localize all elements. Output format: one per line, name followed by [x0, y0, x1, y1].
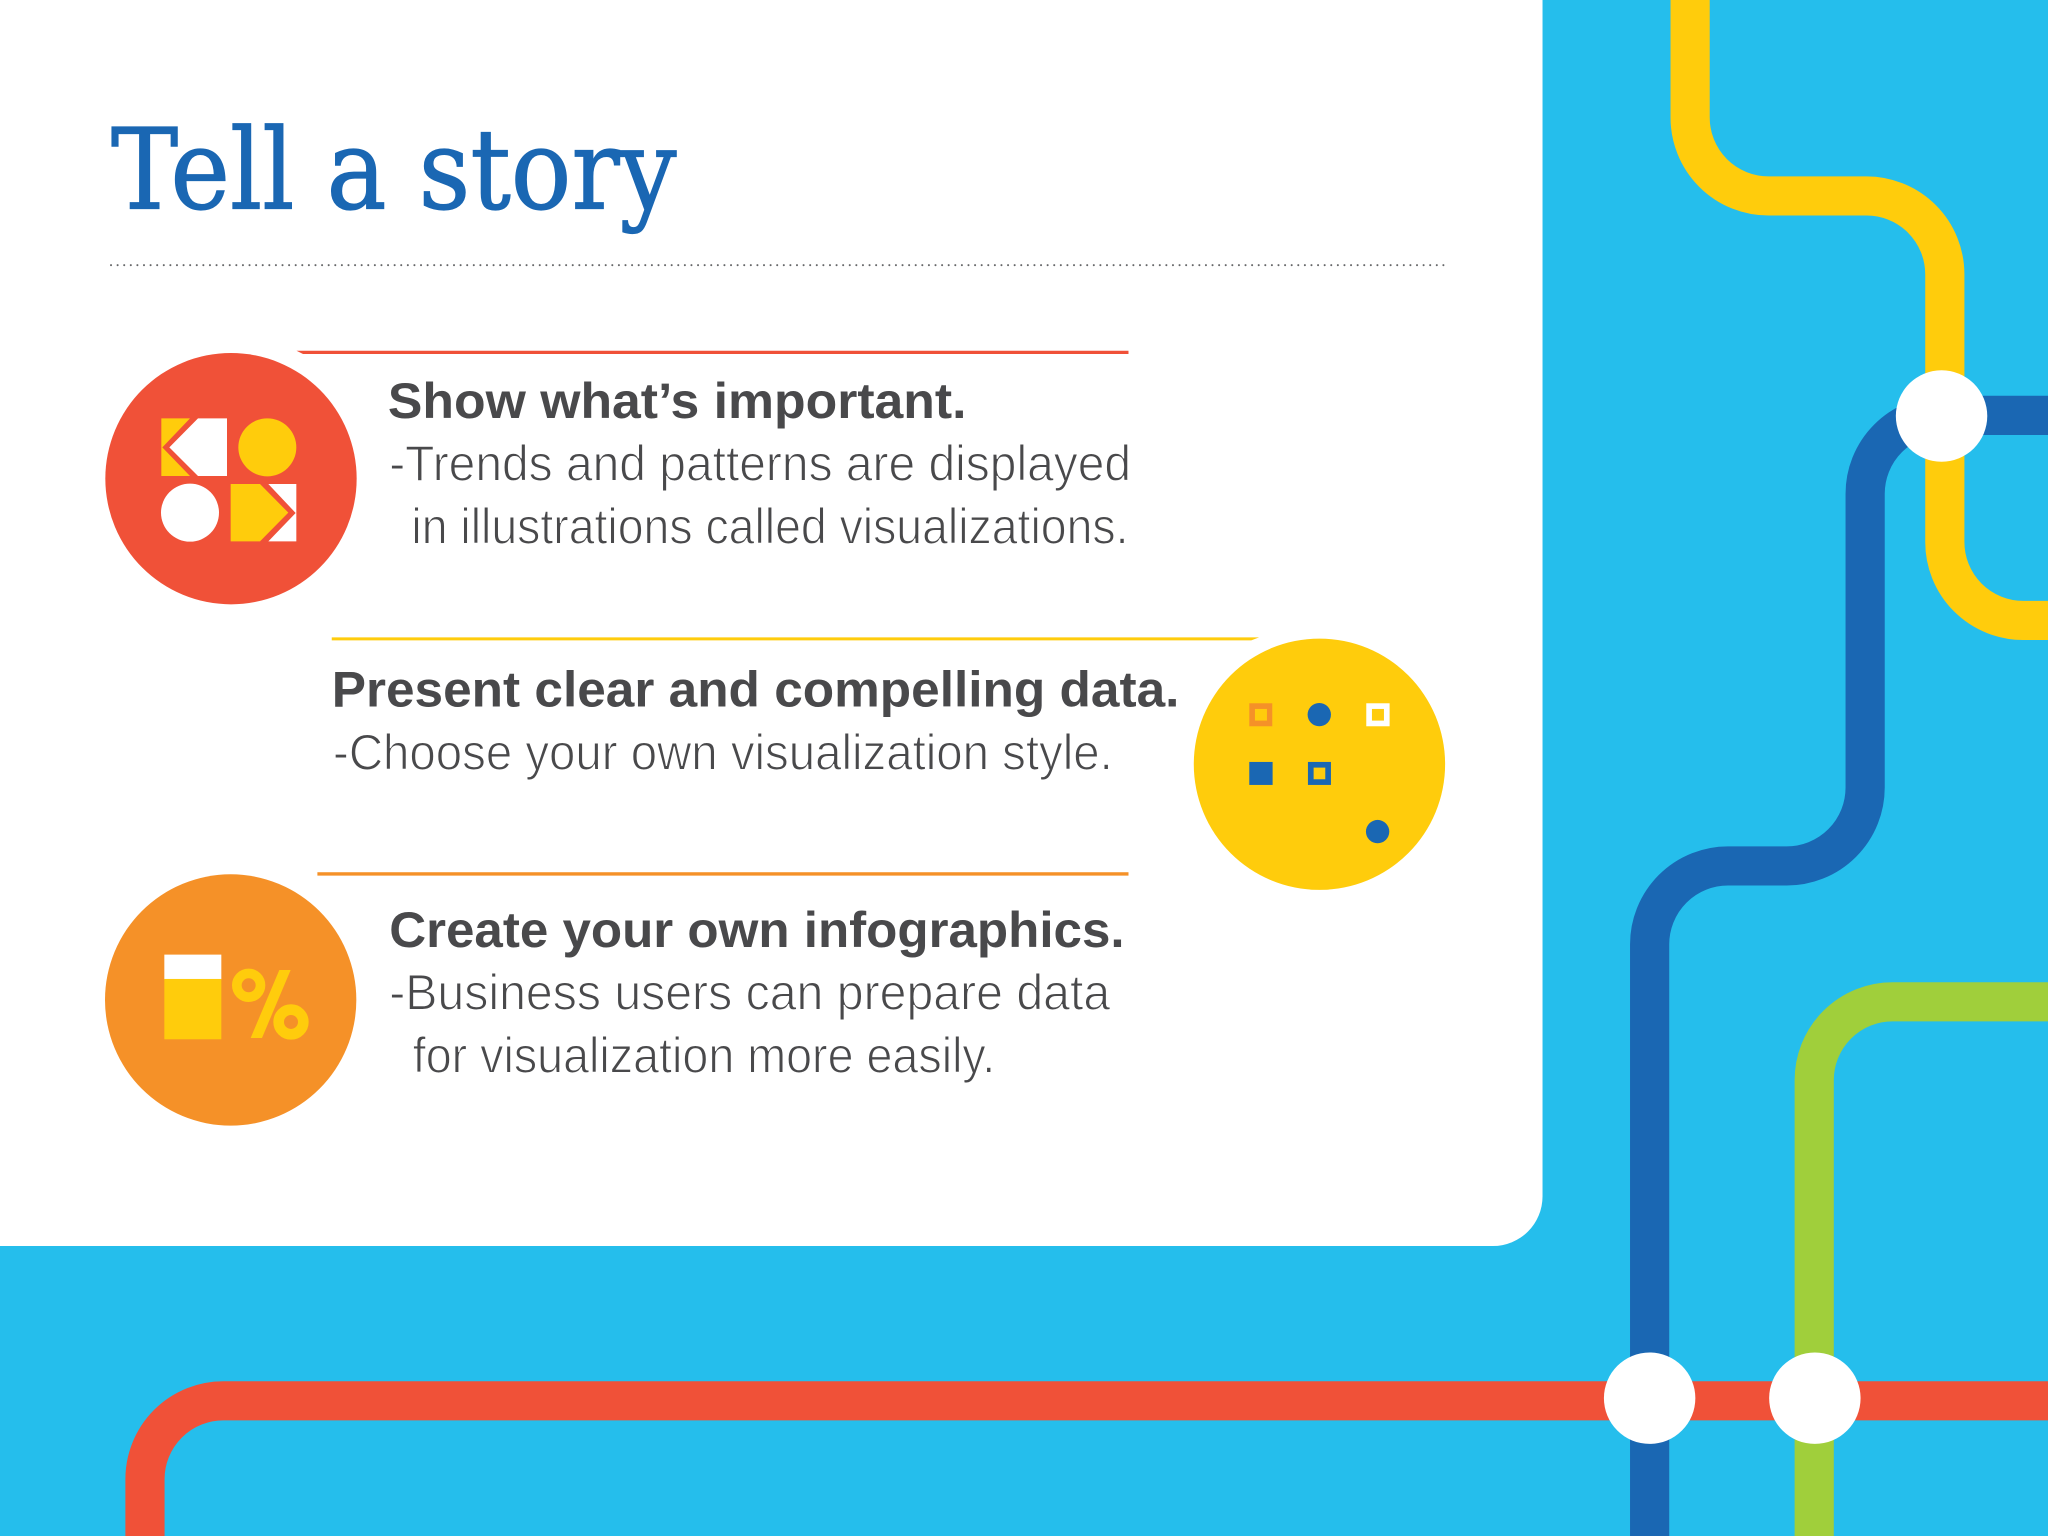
accent rule: orange: [317, 872, 1128, 876]
body text: trends and patterns: in illustrations called visualizations.: [411, 498, 1128, 554]
metro station: upper right: [1896, 370, 1987, 462]
metro line: green: [1814, 1002, 2048, 1536]
body text: choose your style: -Choose your own visualization style.: [333, 724, 1113, 780]
body text: trends and patterns: -Trends and patterns are displayed: [389, 436, 1131, 492]
icon: percent bar on orange circle: [105, 874, 356, 1126]
icon: dots and squares on yellow circle: [1194, 639, 1445, 890]
title: Tell a story: [111, 106, 677, 235]
metro line: red: [145, 1401, 2048, 1536]
item 3: create your own infographics: [105, 872, 1128, 1126]
body text: business users: for visualization more easily.: [413, 1027, 995, 1083]
accent rule: red: [296, 351, 1128, 354]
heading: present clear and compelling data: Present clear and compelling data.: [332, 662, 1179, 718]
item 2: present clear and compelling data: [332, 637, 1445, 890]
dotted divider: [111, 264, 1446, 266]
body text: trends and patterns: [389, 436, 1131, 554]
icon: shapes on red circle: [105, 353, 357, 604]
metro station: lower left: [1604, 1352, 1695, 1444]
body text: business users: [389, 965, 1111, 1083]
white content panel: [0, 0, 1543, 1246]
item 1: show what's important: [105, 351, 1131, 604]
body text: business users: -Business users can prepare data: [389, 965, 1111, 1021]
heading: create your own infographics: Create your own infographics.: [389, 902, 1125, 958]
accent rule: yellow: [332, 637, 1259, 640]
metro line: yellow: [1690, 0, 2048, 620]
metro station: lower right: [1769, 1352, 1861, 1444]
heading: show what's important: Show what’s important.: [388, 373, 967, 429]
metro line: blue: [1650, 415, 2048, 1536]
